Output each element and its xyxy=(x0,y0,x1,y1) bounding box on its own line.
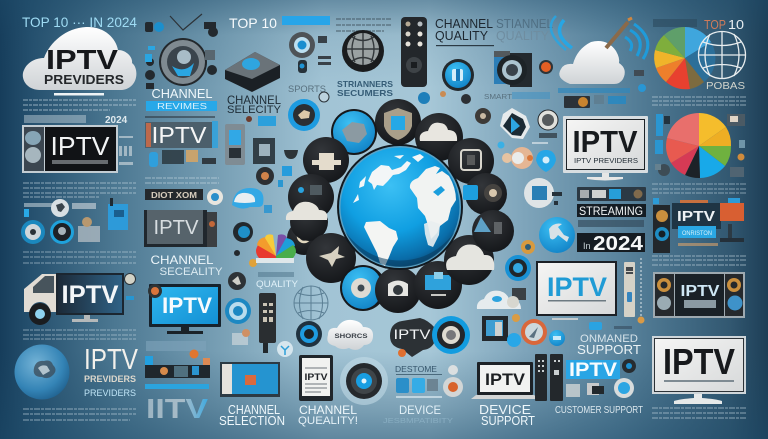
panel: IPTV streaming device: ONRISTON xyxy=(682,230,712,237)
disc: gear xyxy=(340,265,386,311)
label: streamers securers: SECUMERS xyxy=(337,88,393,98)
logo text: IPTV previders: PREVIDERS xyxy=(84,374,136,385)
icon: ring with blue xyxy=(505,255,531,281)
disc: tools xyxy=(288,174,334,220)
heading: channel selecity xyxy=(227,93,282,126)
blue band xyxy=(282,16,330,25)
label: device compatibility: DEVICE xyxy=(399,403,441,417)
pie chart: bottom xyxy=(666,113,731,178)
disc: blue gem xyxy=(331,109,377,155)
label: channel quality: QUEALITY! xyxy=(298,415,358,427)
icon: hexagon badge xyxy=(500,108,530,139)
tv panel: IPTV xyxy=(145,116,218,148)
disc: server xyxy=(303,137,349,183)
cloud: shorts xyxy=(327,320,373,350)
icon: orange ring xyxy=(521,319,547,345)
icon: cloud with wifi and stick xyxy=(551,16,648,84)
icon cluster: mixed gadgets xyxy=(232,138,298,213)
cloud: shorts: SHORCS xyxy=(334,333,368,340)
logo text: IITV: IITV xyxy=(146,393,208,424)
label: streamers securers xyxy=(337,79,393,98)
label: pobas: POBAS xyxy=(706,80,745,92)
laptop: IPTV xyxy=(471,362,539,399)
label: customer support: CUSTOMER SUPPORT xyxy=(555,405,643,416)
icon: photo frame xyxy=(482,316,508,341)
icon: camera xyxy=(494,51,532,87)
heading: top 10: TOP 10 xyxy=(229,15,277,31)
disc: cloud xyxy=(415,113,463,161)
pie chart: top xyxy=(654,27,715,89)
text block: lines xyxy=(652,184,746,193)
heading: channel sequality: CHANNEL xyxy=(150,253,214,267)
disc: triangle xyxy=(472,210,514,252)
icon: large blue disc xyxy=(539,217,575,253)
text block: intro lines xyxy=(23,100,136,110)
icon: dial with antenna xyxy=(159,14,207,86)
logo text: IPTV previders: IPTV xyxy=(84,344,139,376)
banner: blue IPTV: IPTV xyxy=(569,360,617,381)
tv: IPTV previders white: IPTV xyxy=(572,124,638,159)
heading: channel quality: CHANNEL xyxy=(435,16,493,31)
icon: orange knob xyxy=(539,60,553,74)
heading: channel reviews: CHANNEL xyxy=(152,86,212,101)
icon cluster: right of pie xyxy=(727,114,745,177)
cloud logo: IPTV providers xyxy=(23,27,136,96)
icon: robot device xyxy=(443,365,463,397)
panel: IPTV streaming device: IPTV xyxy=(677,208,715,225)
icon cluster: devices under panel xyxy=(149,150,216,167)
tv: blue IPTV on white: IPTV xyxy=(547,272,607,302)
tv panel: blue IPTV xyxy=(148,284,221,334)
icon: globe ball xyxy=(342,30,384,72)
banner: streaming xyxy=(577,204,646,227)
heading: channel quality faded xyxy=(496,16,553,43)
globe xyxy=(337,144,463,270)
text block: lines xyxy=(652,256,746,265)
icon cluster: small gadgets xyxy=(145,22,218,89)
tv panel: dark IPTV: IPTV xyxy=(154,217,199,239)
icon: side device xyxy=(624,258,644,324)
text block: top small icons xyxy=(653,19,697,27)
text block: body lines xyxy=(23,183,136,197)
icon group: chart bars xyxy=(119,136,133,165)
panel: right inner column xyxy=(505,16,648,416)
text block: lines xyxy=(145,178,219,183)
text block: lines xyxy=(652,97,746,105)
tv panel: IPTV: IPTV xyxy=(152,122,207,148)
heading: onmaned support xyxy=(577,333,641,357)
heading: channel quality faded: QUALITY xyxy=(496,28,549,43)
label: device compatibility xyxy=(383,403,453,425)
laptop: IPTV: IPTV xyxy=(485,370,526,389)
ring of black icon discs xyxy=(286,99,514,313)
heading: onmaned support: SUPPORT xyxy=(577,342,641,357)
icon: small dots xyxy=(319,91,512,163)
label: device support: DEVICE xyxy=(479,402,531,417)
text block: small label xyxy=(336,19,392,31)
cloud: small right xyxy=(477,291,521,309)
tv panel: IPTV: IPTV xyxy=(50,131,110,161)
text block: lines xyxy=(23,330,136,339)
panel: top centre xyxy=(282,16,553,163)
label: streamers securers: STRIANNERS xyxy=(337,79,393,89)
disc: ring xyxy=(287,221,321,255)
icon: webcam xyxy=(289,32,331,73)
text block: lines xyxy=(23,252,136,263)
disc: badge xyxy=(375,99,421,145)
label: channel selection: CHANNEL xyxy=(228,402,280,417)
disc: frame icon xyxy=(448,138,494,184)
disc: cloud low xyxy=(286,202,328,241)
disc: shield photo xyxy=(524,178,554,208)
heading: channel quality faded: STIANNEL xyxy=(496,16,553,31)
disc: cloud right xyxy=(444,235,494,285)
panel: IPTV streaming device xyxy=(653,198,744,253)
icon: wire globe xyxy=(698,31,746,79)
icon: wire globe xyxy=(294,286,328,320)
label: destome: DESTOME xyxy=(395,364,437,374)
icon cluster: media strip xyxy=(145,341,210,389)
logo text: IPTV previders: PREVIDERS xyxy=(84,388,136,399)
heading: top 10 xyxy=(704,17,744,32)
label: destome xyxy=(395,364,442,398)
icon: concentric lens xyxy=(340,357,388,405)
tablet: IPTV: IPTV xyxy=(304,372,328,383)
icon: remote control small xyxy=(259,293,276,353)
disc: blue monitor xyxy=(414,261,462,309)
heading: channel quality xyxy=(435,16,494,46)
icon cluster: small circles xyxy=(225,222,257,345)
icon: blue ring badge xyxy=(288,99,320,131)
icon cluster: controller xyxy=(507,288,632,330)
label: channel quality xyxy=(298,403,358,427)
icon: blue button xyxy=(507,330,565,347)
heading: channel sequality xyxy=(150,253,223,278)
banner: in 2024 xyxy=(577,233,645,255)
tv: big IPTV xyxy=(652,336,746,404)
tv: big IPTV: IPTV xyxy=(663,341,735,382)
heading: channel selecity: SELECITY xyxy=(227,104,282,116)
icon: blue ring target xyxy=(432,316,470,354)
icon row: media buttons xyxy=(24,198,128,230)
heading: onmaned support: ONMANED xyxy=(580,333,638,345)
panel: third column xyxy=(219,15,298,428)
panel: dark IPTV tv xyxy=(653,272,745,318)
icon: white dial xyxy=(207,189,223,205)
tv panel: dark IPTV xyxy=(144,210,217,247)
icon cluster: blue strip xyxy=(558,70,646,108)
panel: left column xyxy=(14,14,139,420)
heading: channel reviews xyxy=(146,86,217,111)
label: device compatibility: JESBMPATIBITY xyxy=(383,416,453,425)
tv panel: IPTV xyxy=(22,125,118,173)
icon: orange dial xyxy=(521,240,535,254)
label: device support xyxy=(479,402,535,428)
heading: top 10: 10 xyxy=(728,17,744,32)
remotes pair xyxy=(535,354,563,401)
tv panel: blue IPTV: IPTV xyxy=(162,293,212,318)
tablet: IPTV xyxy=(299,355,333,401)
label: channel selection xyxy=(219,402,285,428)
icon: gadget cluster xyxy=(566,359,636,398)
panel: right column xyxy=(652,17,746,418)
heading: channel reviews: REVIMES xyxy=(157,102,207,111)
label: channel quality: CHANNEL xyxy=(299,403,357,417)
text block: bottom lines xyxy=(23,409,136,420)
icon: remote control xyxy=(401,17,427,87)
dark label xyxy=(145,189,203,200)
tv: blue IPTV on white xyxy=(536,261,617,320)
icon: peacock logo xyxy=(256,234,296,263)
small bars xyxy=(552,192,562,205)
text block: bottom lines xyxy=(652,408,746,418)
icon: antenna circle xyxy=(277,341,293,357)
banner: in 2024: In xyxy=(583,241,591,251)
panel: dark IPTV tv: IPTV xyxy=(680,283,720,300)
heading: channel selecity: CHANNEL xyxy=(227,93,281,107)
cloud logo: IPTV providers: IPTV xyxy=(46,44,118,75)
heading: top 10 in 2024: TOP 10 ··· IN 2024 xyxy=(22,14,137,30)
icon: dial small xyxy=(296,321,322,347)
icon: blue power button xyxy=(442,59,474,91)
disc: dual dials xyxy=(463,173,507,215)
icon: set-top box xyxy=(225,52,280,92)
tablet on stand: small screen xyxy=(220,362,280,397)
banner: streaming: STREAMING xyxy=(579,206,643,218)
tv: IPTV previders white: IPTV PREVIDERS xyxy=(574,156,638,165)
label: channel selection: SELECTION xyxy=(219,413,285,428)
disc: plane xyxy=(306,233,356,283)
heading: top 10: TOP xyxy=(704,17,726,32)
panel: second column xyxy=(144,14,223,424)
cloud logo: IPTV providers: PREVIDERS xyxy=(44,72,124,87)
label: sports: SPORTS xyxy=(288,84,326,94)
truck with IPTV screen: IPTV xyxy=(62,281,119,309)
central globe cluster xyxy=(256,99,539,428)
label: 2024: 2024 xyxy=(105,115,128,126)
banner: in 2024: 2024 xyxy=(593,233,644,255)
speech bubble: IPTV: IPTV xyxy=(394,326,431,342)
label: smart: SMART xyxy=(484,92,512,101)
icon strip above streaming xyxy=(577,187,646,201)
disc: camera xyxy=(375,267,421,313)
icon: lock device xyxy=(225,116,252,165)
label: device support: SUPPORT xyxy=(481,413,535,428)
dark label: DIOT XOM xyxy=(151,191,197,200)
heading: channel quality: QUALITY xyxy=(435,28,488,43)
speech bubble: IPTV xyxy=(390,318,436,357)
icon: badge group xyxy=(511,92,558,172)
truck with IPTV screen xyxy=(24,273,136,325)
tv: IPTV previders white xyxy=(563,116,648,180)
label: 2024 xyxy=(24,115,128,126)
logo text: IPTV previders xyxy=(84,344,139,399)
icon: blue cloud disc xyxy=(14,344,70,400)
label: quality xyxy=(256,272,299,290)
label: quality: QUALITY xyxy=(256,279,299,290)
heading: channel sequality: SECEALITY xyxy=(160,266,223,278)
icon: camera dials xyxy=(21,217,100,244)
icon cluster: left of pie xyxy=(655,114,670,176)
